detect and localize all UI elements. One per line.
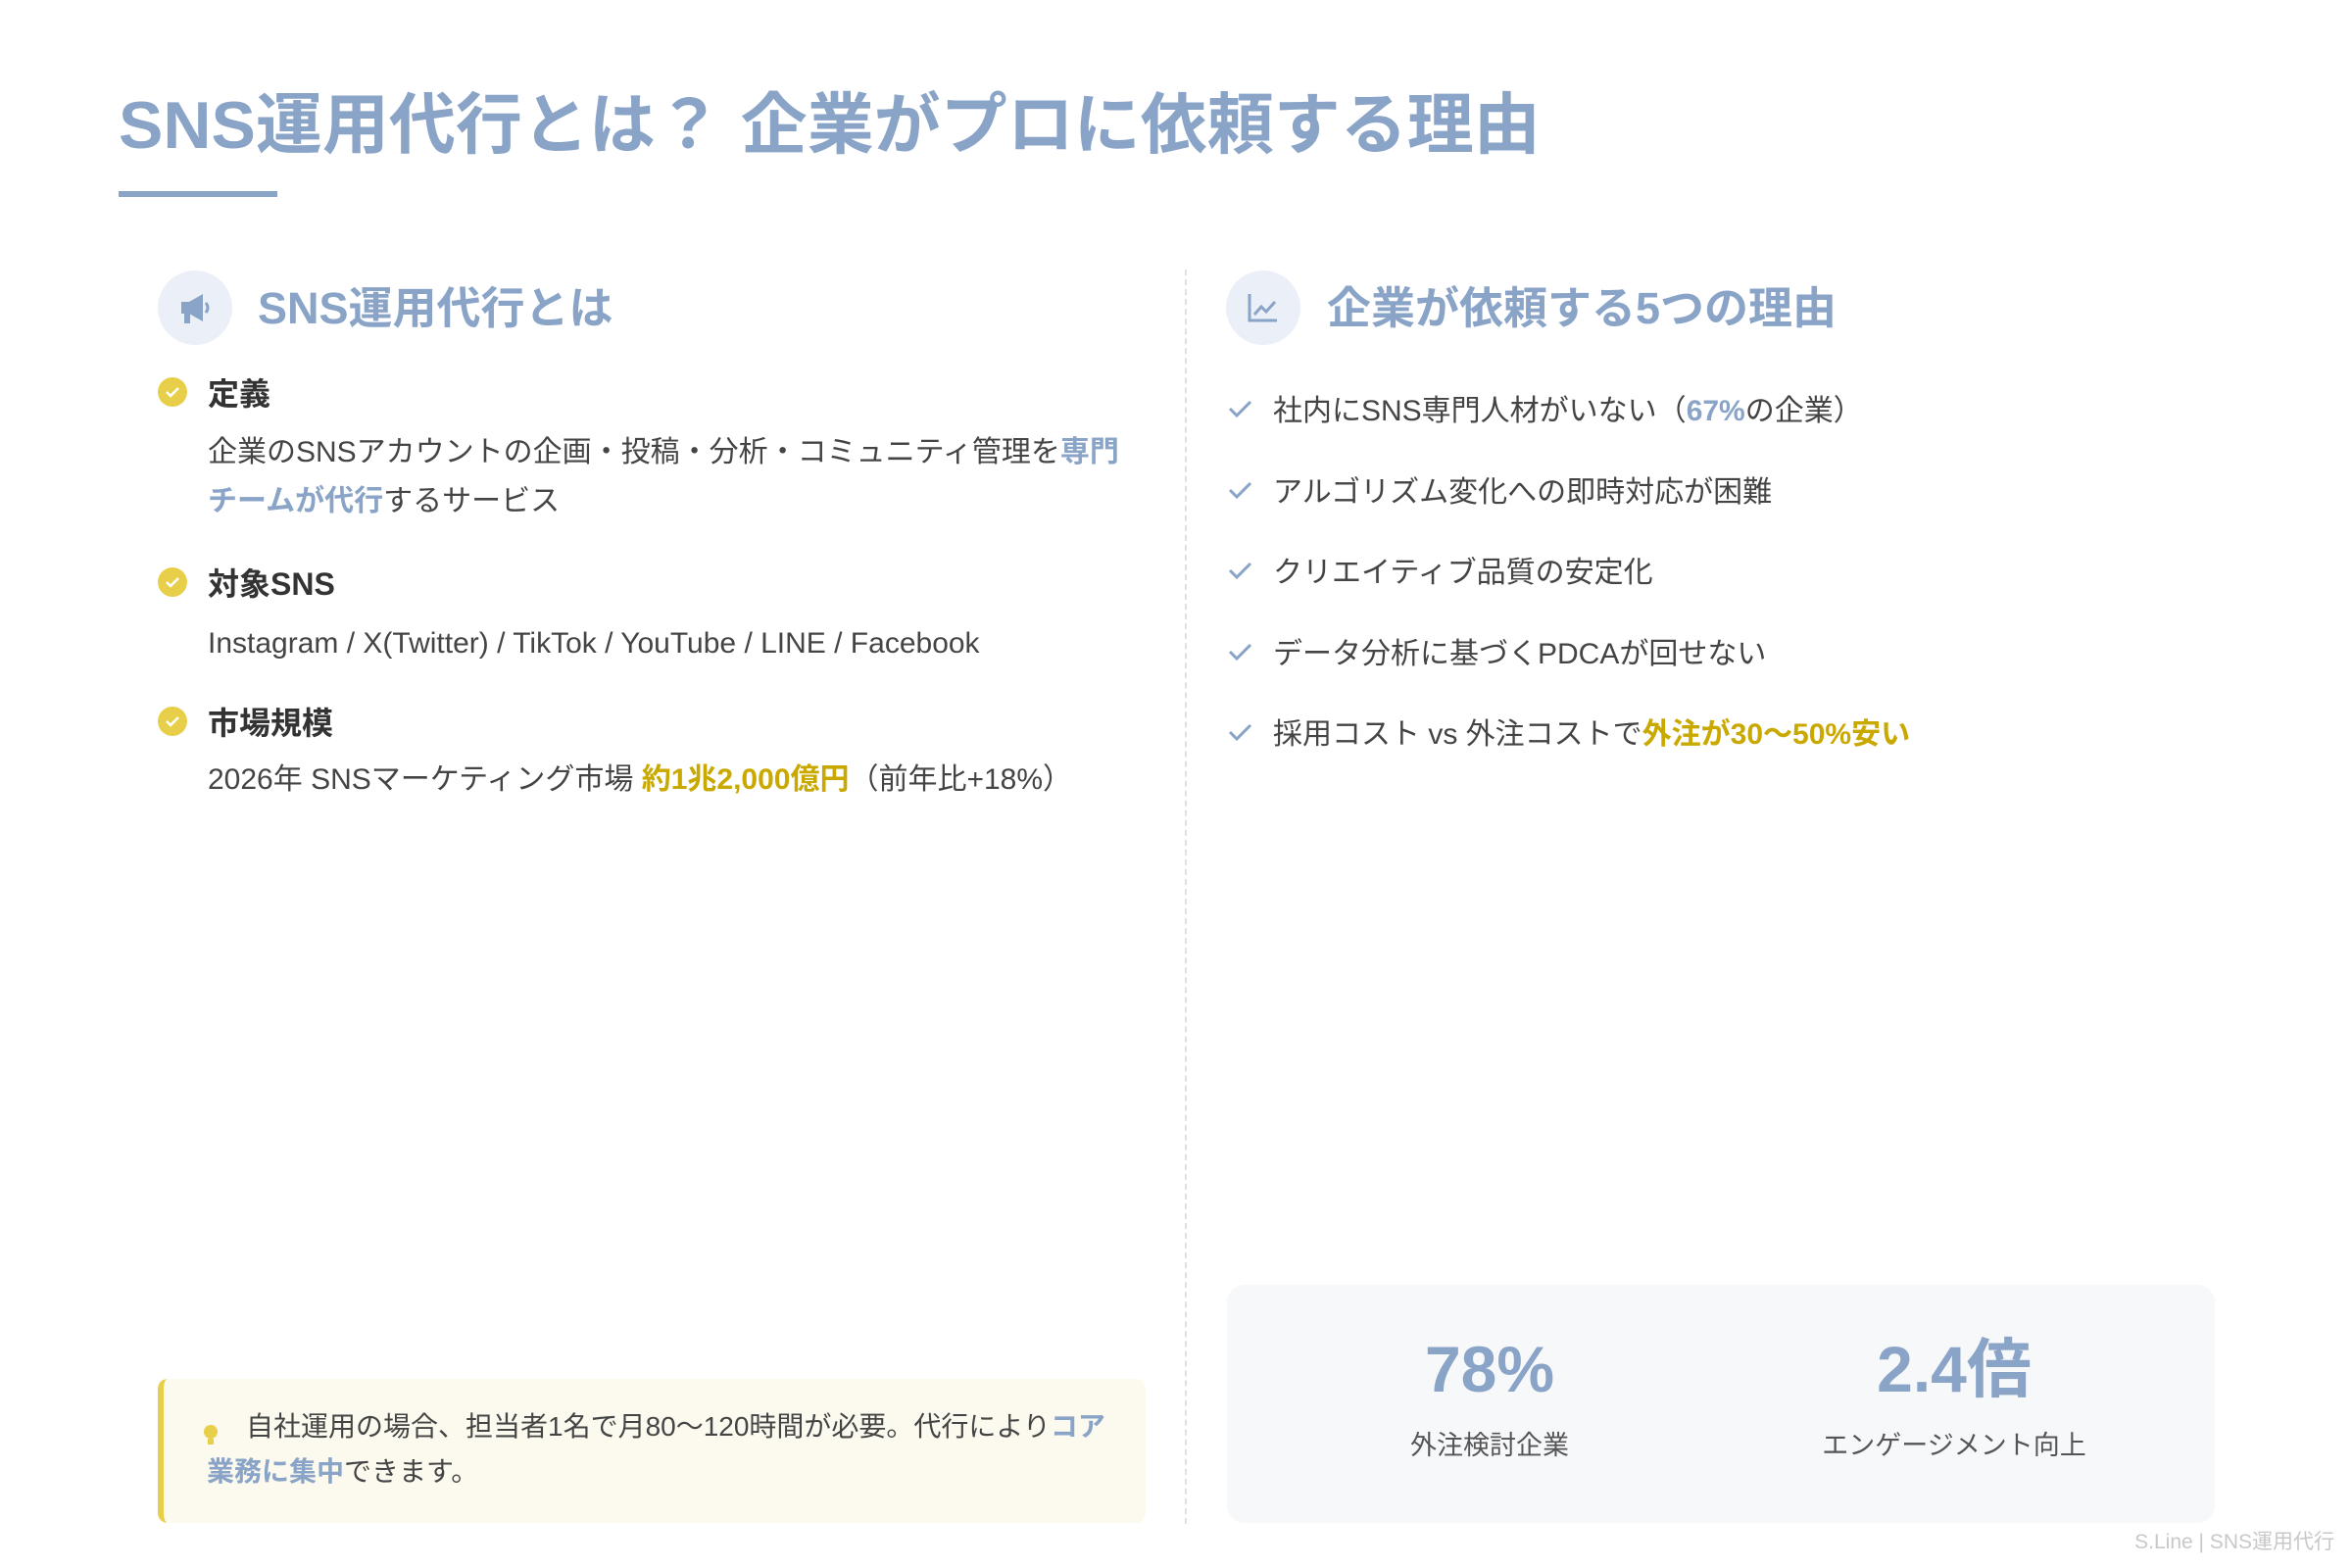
icon: check xyxy=(158,567,187,597)
reason 3: クリエイティブ品質の安定化 xyxy=(1273,557,1653,589)
item: definition: 企業のSNSアカウントの企画・投稿・分析・コミュニティ管理を専門 xyxy=(208,436,1119,468)
title: SNS運用代行とは？ 企業がプロに依頼する理由 xyxy=(119,88,1541,163)
item: market size: 2026年 SNSマーケティング市場 約1兆2,000億円（前年比+18%） xyxy=(208,763,1072,796)
item: definition: チームが代行するサービス xyxy=(208,485,560,517)
icon: chart xyxy=(1226,270,1300,345)
heading: left section: SNS運用代行とは xyxy=(258,283,613,333)
reason 1: 社内にSNS専門人材がいない（67%の企業） xyxy=(1273,395,1863,427)
stat: 78%: 外注検討企業 xyxy=(1410,1431,1569,1460)
item: target SNS: Instagram / X(Twitter) / TikTok / YouTube / LINE / Facebook xyxy=(208,627,980,660)
stat: 2.4x: エンゲージメント向上 xyxy=(1822,1431,2086,1460)
title underline xyxy=(119,191,277,197)
icon: megaphone xyxy=(158,270,232,345)
item: target SNS xyxy=(158,566,980,660)
reasons list xyxy=(1229,395,1910,751)
icon: bulb xyxy=(204,1425,218,1445)
footer: S.Line | SNS運用代行 xyxy=(2134,1531,2334,1553)
reason 4: データ分析に基づくPDCAが回せない xyxy=(1273,638,1766,670)
stat: 78% xyxy=(1410,1333,1569,1460)
item: target SNS: 対象SNS xyxy=(208,566,335,602)
callout: tip: 自社運用の場合、担当者1名で月80〜120時間が必要。代行によりコア業務に集中できます。 xyxy=(207,1411,1105,1487)
stat: 2.4x: 2.4倍 xyxy=(1877,1333,2032,1405)
icon: check xyxy=(158,377,187,407)
heading: right section: 企業が依頼する5つの理由 xyxy=(1327,283,1837,333)
item: definition: 定義 xyxy=(208,376,270,412)
stat: 78%: 78% xyxy=(1425,1333,1554,1405)
reason 5: 採用コスト vs 外注コストで外注が30〜50%安い xyxy=(1273,718,1910,751)
item: market size: 市場規模 xyxy=(208,706,333,741)
divider xyxy=(1185,270,1187,1524)
item: market size xyxy=(158,706,1072,796)
stat: 2.4x xyxy=(1822,1333,2086,1460)
reason 2: アルゴリズム変化への即時対応が困難 xyxy=(1273,476,1772,509)
item: definition xyxy=(158,376,1119,517)
icon: check xyxy=(158,707,187,736)
callout: tip xyxy=(158,1379,1146,1523)
stats panel xyxy=(1227,1285,2215,1523)
